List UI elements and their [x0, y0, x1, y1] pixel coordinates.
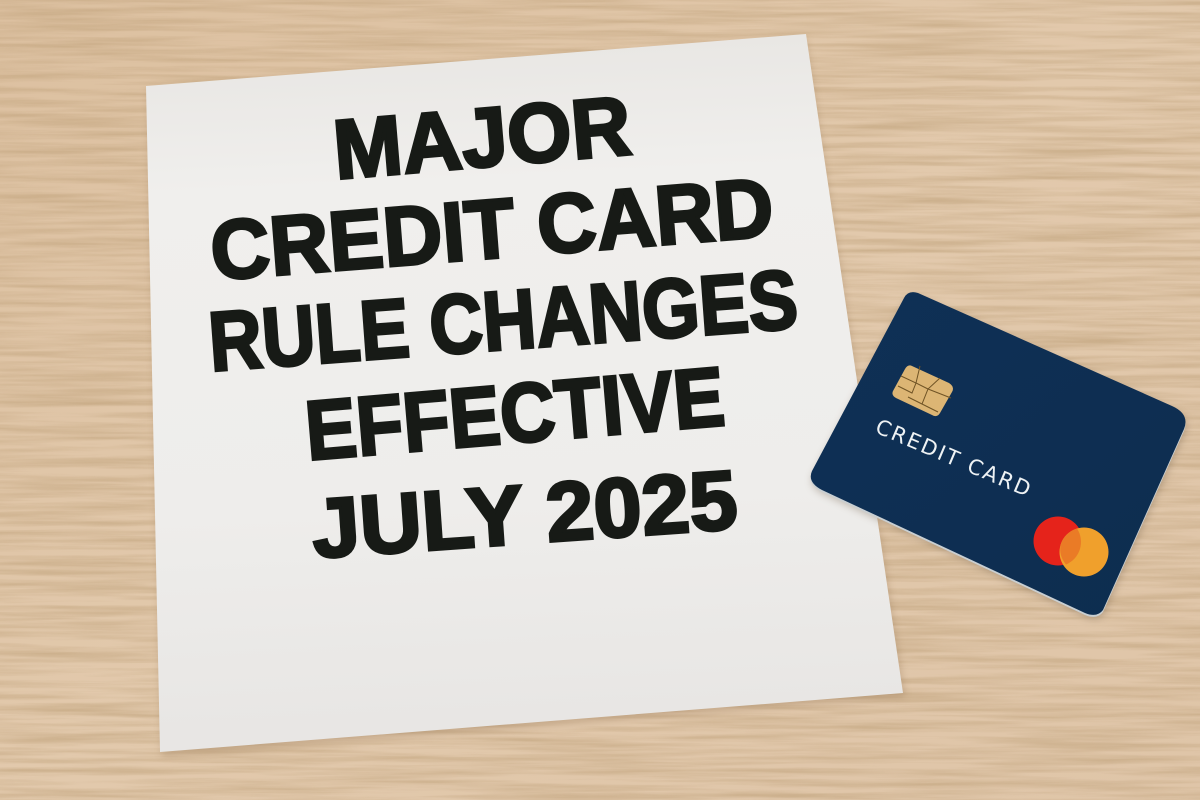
icon: card network logo: [1034, 516, 1108, 576]
card label: CREDIT CARD: [872, 415, 1034, 501]
headline text: RULE CHANGES: [205, 252, 801, 389]
credit card: [811, 292, 1186, 619]
icon: EMV chip: [892, 365, 953, 416]
headline text: MAJOR: [330, 78, 634, 197]
headline text: JULY 2025: [309, 452, 740, 576]
headline text: [205, 78, 801, 576]
paper sheet with headline: [146, 34, 905, 756]
headline text: CREDIT CARD: [207, 160, 777, 298]
headline text: EFFECTIVE: [302, 349, 728, 478]
